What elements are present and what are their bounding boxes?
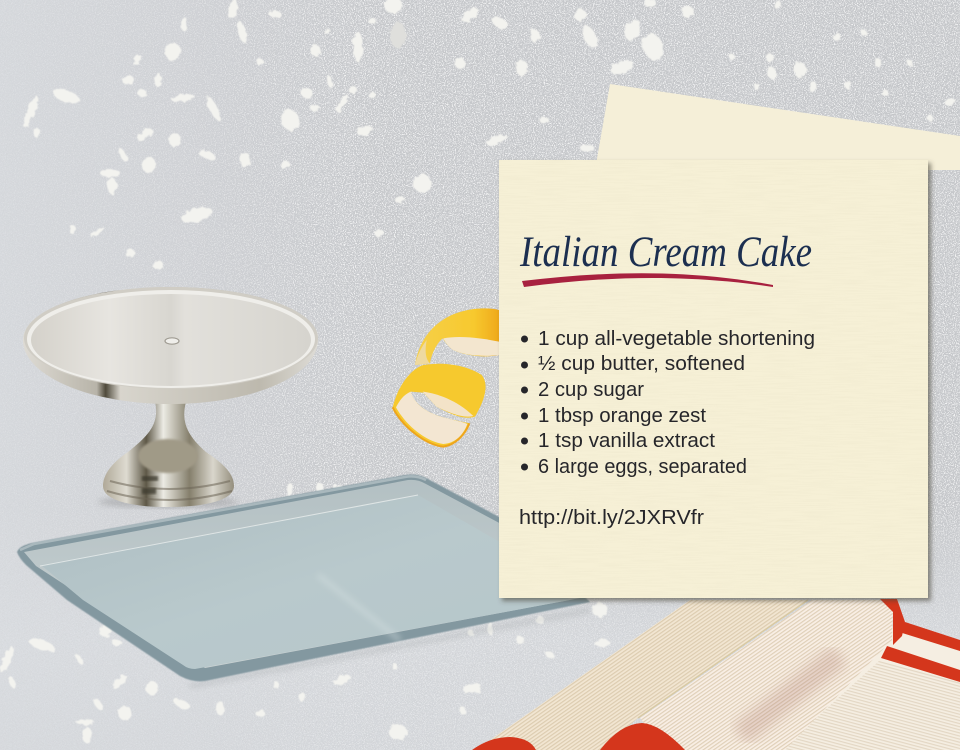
tray top edge highlight [20, 476, 426, 550]
baking sheet tray [17, 474, 590, 686]
tray outer edge [17, 474, 590, 681]
red binding end left [472, 737, 536, 750]
title: Italian Cream Cake: Italian Cream Cake [519, 229, 812, 276]
ingredient list: 1 tbsp orange zest [538, 405, 706, 427]
ingredient list: 6 large eggs, separated [538, 456, 747, 478]
flat mat [770, 625, 960, 750]
ingredient list [521, 328, 815, 478]
rolled silicone baking mats [472, 599, 960, 750]
ingredient list: 1 cup all-vegetable shortening [538, 328, 815, 350]
card paper [499, 160, 928, 598]
ingredient list: 1 tsp vanilla extract [538, 430, 715, 452]
red binding end centre [600, 723, 685, 750]
tray rim [24, 480, 580, 668]
ingredient list: ½ cup butter, softened [538, 353, 745, 375]
recipe card [499, 160, 928, 598]
mat red stripes [881, 622, 960, 682]
ingredient list: 2 cup sugar [538, 379, 644, 401]
orange zest peel [393, 308, 499, 447]
rolled mat left [478, 600, 808, 750]
stand foot shadow [98, 496, 238, 508]
cake stand [23, 287, 318, 508]
title brush underline [522, 273, 773, 287]
recipe link: http://bit.ly/2JXRVfr [519, 507, 704, 529]
tray cast shadow [190, 610, 590, 686]
stand pedestal [103, 402, 234, 507]
stand plate [23, 287, 318, 404]
back sheet of recipe paper [595, 84, 960, 170]
rolled mat right [640, 600, 893, 750]
red binding end top [880, 599, 905, 645]
tray floor [41, 495, 570, 669]
